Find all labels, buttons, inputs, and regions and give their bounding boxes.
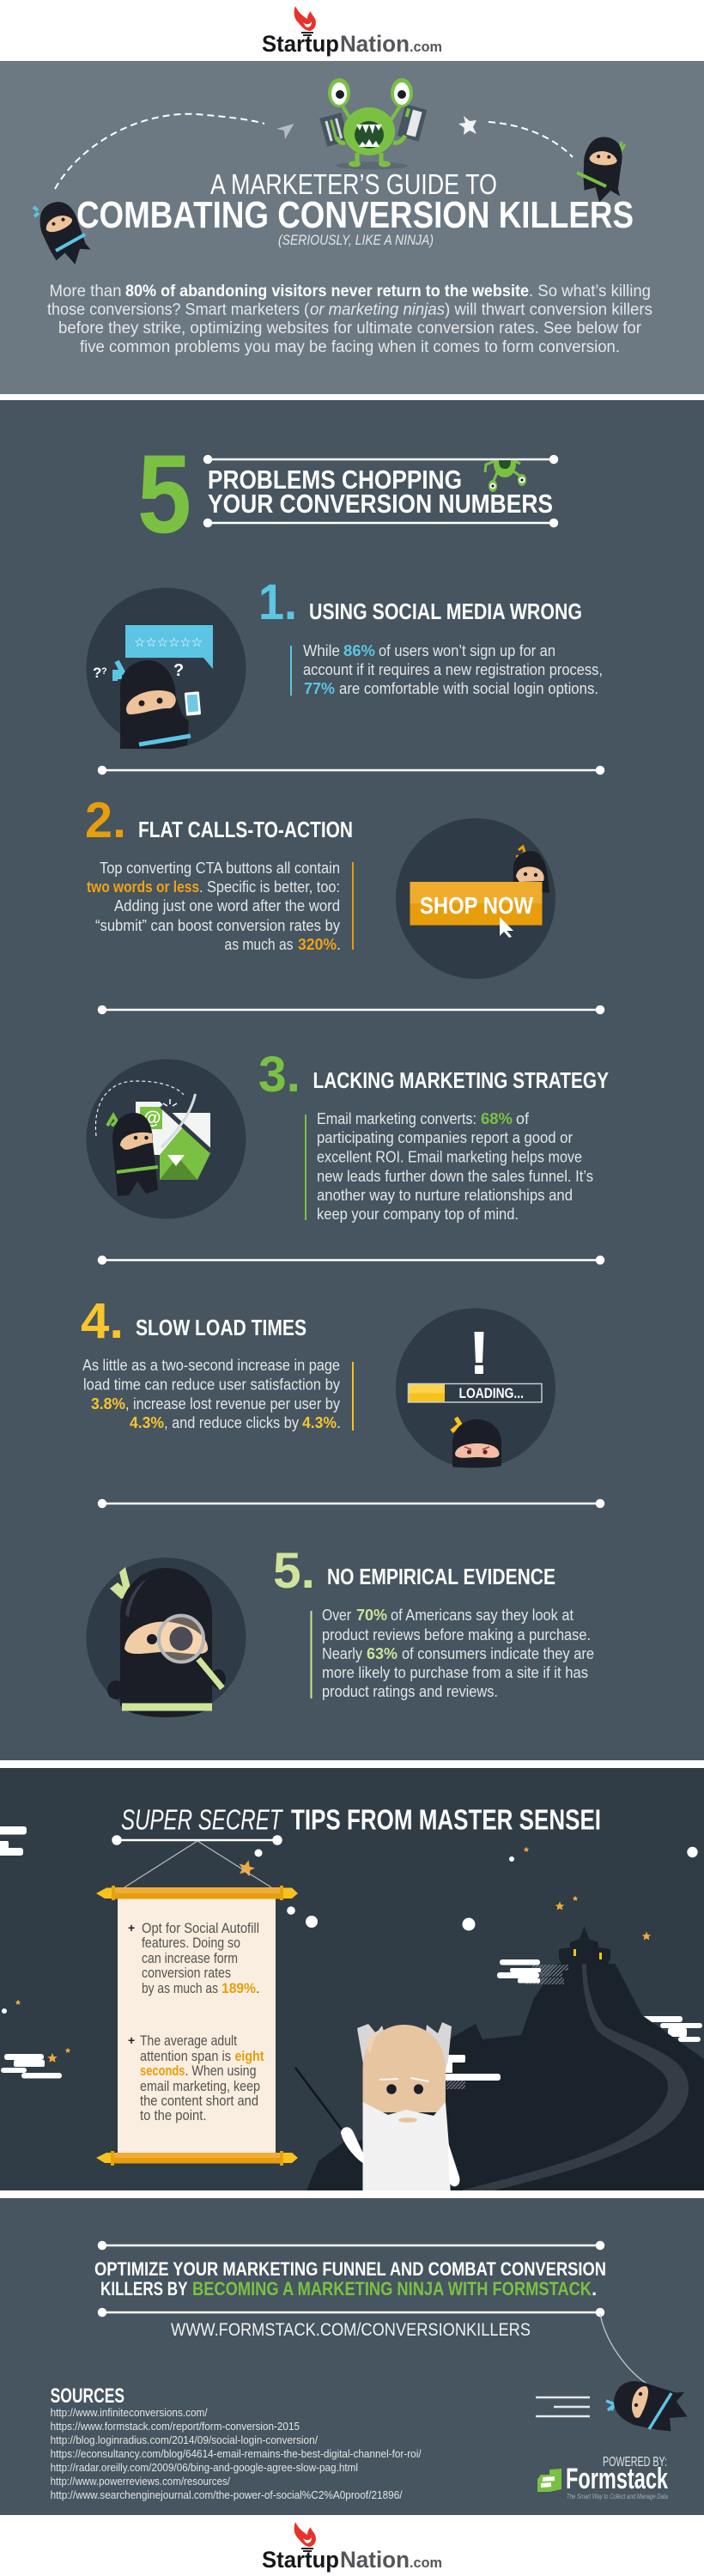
heading: NO EMPIRICAL EVIDENCE	[327, 1564, 555, 1589]
heading	[258, 1047, 609, 1103]
icon: hanging monster	[485, 460, 526, 492]
panel: header	[0, 61, 704, 400]
text block: 4.3%	[302, 1414, 337, 1431]
icon: loading bar ninja: LOADING...	[458, 1385, 524, 1401]
text block: product ratings and reviews.	[322, 1683, 498, 1700]
icon: ninja with phone: ☆☆☆☆☆☆	[134, 635, 203, 650]
tip 2: attention span is	[140, 2049, 231, 2064]
text block: “submit” can boost conversion rates by	[95, 917, 340, 934]
heading: 1.	[258, 574, 297, 630]
tip 1: can increase form	[142, 1951, 238, 1966]
road	[461, 1964, 689, 2190]
text block: Email marketing converts:	[317, 1110, 476, 1127]
tip 1: .	[256, 1981, 260, 1996]
text block: .	[337, 936, 341, 953]
text block: of users won’t sign up for an	[379, 642, 555, 659]
call to action text: KILLERS BY	[100, 2278, 187, 2300]
text block: load time can reduce user satisfaction by	[83, 1376, 340, 1393]
heading: 5 problems: YOUR CONVERSION NUMBERS	[208, 489, 553, 519]
problem 3	[86, 1047, 609, 1223]
sources: http://www.powerreviews.com/resources/	[51, 2475, 230, 2488]
text block: Nearly	[322, 1645, 362, 1662]
text block: 68%	[481, 1110, 513, 1127]
logo: StartupNation bottom: .com	[410, 2555, 442, 2571]
tip 1: 189%	[222, 1981, 256, 1996]
intro text block	[47, 282, 652, 356]
icon: loading bar ninja	[396, 1309, 555, 1468]
heading: 5 problems	[137, 431, 557, 556]
mountain with temple	[306, 1926, 704, 2190]
icon: ninja with phone: ?	[101, 666, 107, 677]
problem 2	[85, 793, 555, 979]
text block: Top converting CTA buttons all contain	[100, 860, 340, 877]
sources: SOURCES	[51, 2385, 124, 2408]
heading: SLOW LOAD TIMES	[136, 1315, 306, 1340]
tip 1: features. Doing so	[142, 1935, 240, 1951]
heading: FLAT CALLS-TO-ACTION	[138, 817, 353, 842]
icon: ninja right	[576, 133, 631, 206]
temple	[559, 1926, 610, 1966]
logo: StartupNation bottom	[262, 2522, 442, 2573]
icon: cursor	[500, 917, 513, 938]
logo: StartupNation top: Nation	[340, 31, 410, 57]
tip 1: by as much as	[142, 1981, 218, 1996]
clouds	[0, 1826, 702, 2078]
text block: account if it requires a new registration process,	[303, 661, 603, 678]
icon: green monster	[319, 78, 427, 170]
text block: As little as a two-second increase in page	[82, 1357, 340, 1374]
text block: of consumers indicate they are	[402, 1645, 594, 1662]
icon: shop now button: SHOP NOW	[420, 892, 533, 919]
text block: , and reduce clicks by	[164, 1414, 299, 1431]
url: WWW.FORMSTACK.COM/CONVERSIONKILLERS	[171, 2320, 531, 2340]
heading: 3.	[258, 1047, 300, 1103]
problem 1	[86, 574, 603, 749]
text block	[87, 860, 354, 953]
sources	[51, 2385, 422, 2501]
text block: Over	[322, 1607, 351, 1624]
master sensei	[295, 2022, 459, 2190]
tip 2: eight	[235, 2049, 264, 2064]
tip 2: +	[128, 2033, 135, 2047]
sources: http://blog.loginradius.com/2014/09/social-login-conversion/	[51, 2433, 318, 2446]
scroll top roller	[96, 1886, 298, 1900]
heading: USING SOCIAL MEDIA WRONG	[309, 598, 582, 624]
sources: https://www.formstack.com/report/form-conversion-2015	[51, 2420, 300, 2433]
text block: Adding just one word after the word	[114, 897, 340, 914]
text block: . Specific is better, too:	[199, 878, 340, 896]
tip 2: . When using	[185, 2063, 256, 2079]
tip 2: to the point.	[140, 2108, 206, 2123]
panel: call to action	[0, 2190, 704, 2515]
call to action text: OPTIMIZE YOUR MARKETING FUNNEL AND COMBAT CONVERSION	[94, 2258, 606, 2280]
heading: 5 problems: 5	[137, 431, 191, 556]
intro text block: 80% of abandoning visitors never return to the website	[125, 282, 529, 301]
cloud mid with hatching	[438, 1959, 568, 2089]
tip 1	[128, 1921, 260, 1996]
tip 2	[128, 2033, 264, 2123]
heading: 5.	[273, 1543, 315, 1599]
heading	[121, 1803, 601, 1836]
title: A MARKETER’S GUIDE TO	[210, 168, 497, 200]
icon: shop now button	[396, 818, 555, 979]
intro text block: More than	[50, 282, 122, 301]
logo: StartupNation top	[262, 6, 442, 57]
text block: are comfortable with social login options.	[339, 680, 598, 697]
text block: product reviews before making a purchase.	[322, 1626, 591, 1643]
call to action text	[94, 2258, 606, 2300]
text block: 320%	[298, 936, 337, 953]
tip 1: Opt for Social Autofill	[142, 1921, 259, 1936]
logo: StartupNation bottom: Startup	[262, 2547, 339, 2573]
text block: .	[337, 1414, 341, 1431]
text block: another way to nurture relationships and	[317, 1187, 573, 1204]
text block: While	[303, 642, 340, 659]
icon: ninja with phone: ?	[93, 665, 101, 681]
tip 2: email marketing, keep	[140, 2079, 260, 2094]
heading: 4.	[81, 1293, 124, 1349]
text block: 4.3%	[130, 1414, 164, 1431]
text block: 63%	[367, 1645, 398, 1662]
text block: more likely to purchase from a site if it has	[322, 1664, 588, 1681]
sources: https://econsultancy.com/blog/64614-email-remains-the-best-digital-channel-for-roi/	[51, 2447, 422, 2460]
heading: 5 problems: PROBLEMS CHOPPING	[208, 465, 462, 495]
text block: of Americans say they look at	[391, 1607, 574, 1624]
text block: 3.8%	[91, 1395, 125, 1413]
title	[76, 168, 634, 248]
icon: magnifier	[159, 1616, 222, 1688]
icon: ninja with magnifier	[86, 1558, 246, 1717]
logo: StartupNation top: Startup	[262, 31, 339, 57]
title: (SERIOUSLY, LIKE A NINJA)	[278, 232, 434, 248]
icon: flying ninja on rope	[536, 2314, 695, 2442]
icon: ninja with phone	[86, 587, 246, 749]
heading	[258, 574, 582, 630]
icon: paper plane	[276, 124, 294, 139]
heading	[85, 793, 353, 848]
text block: two words or less	[87, 878, 199, 896]
problem 4	[81, 1293, 555, 1468]
text block: keep your company top of mind.	[317, 1206, 519, 1223]
text block	[311, 1607, 594, 1700]
heading: SUPER SECRET	[121, 1803, 284, 1836]
scroll	[96, 1836, 298, 2166]
sources: http://radar.oreilly.com/2009/06/bing-and-google-agree-slow-pag.html	[51, 2461, 358, 2474]
text block: 86%	[343, 642, 375, 659]
icon: ninja with phone: ?	[173, 661, 184, 680]
tip 1: conversion rates	[142, 1965, 231, 1981]
text block: participating companies report a good or	[317, 1129, 573, 1146]
stars and dots	[2, 1846, 698, 2063]
text block	[290, 642, 603, 697]
intro text block: those conversions? Smart marketers (	[47, 301, 309, 319]
intro text block: . So what’s killing	[529, 282, 651, 301]
arrow: dashed throw arc left	[55, 114, 264, 189]
scroll bottom roller	[96, 2151, 298, 2166]
logo: Formstack: The Smart Way to Collect and Manage Data	[567, 2493, 668, 2500]
intro text block: five common problems you may be facing when it comes to form conversion.	[80, 337, 620, 356]
icon: ninja slicing email: @	[143, 1109, 161, 1128]
panel: tips from master sensei	[0, 1768, 704, 2190]
intro text block: before they strike, optimizing websites for ultimate conversion rates. See below for	[58, 319, 641, 337]
intro text block: or marketing ninjas	[310, 301, 445, 319]
arrow: dashed throw arc right	[489, 122, 573, 157]
icon: shuriken	[458, 116, 476, 135]
logo: StartupNation top: .com	[410, 39, 442, 55]
text block	[82, 1357, 354, 1431]
panel: five problems	[0, 400, 704, 1760]
text block: 70%	[356, 1607, 387, 1624]
heading: LACKING MARKETING STRATEGY	[313, 1067, 609, 1093]
call to action text: BECOMING A MARKETING NINJA WITH FORMSTACK	[192, 2278, 592, 2300]
logo: StartupNation bottom: Nation	[340, 2547, 410, 2573]
tip 2: seconds	[140, 2063, 185, 2079]
text block: 77%	[304, 680, 335, 697]
heading	[81, 1293, 306, 1349]
sources: http://www.infiniteconversions.com/	[51, 2406, 208, 2419]
tip 1: +	[128, 1921, 135, 1935]
call to action text: .	[592, 2278, 597, 2300]
heading: TIPS FROM MASTER SENSEI	[291, 1803, 601, 1836]
logo: Formstack	[537, 2455, 668, 2500]
text block: new leads further down the sales funnel. It’s	[317, 1168, 593, 1185]
problem 5	[86, 1543, 594, 1717]
icon: ninja slicing email	[86, 1060, 246, 1219]
icon: ninja left	[33, 197, 94, 270]
heading	[273, 1543, 555, 1599]
logo: Formstack: POWERED BY:	[603, 2455, 667, 2470]
tip 2: The average adult	[140, 2033, 237, 2049]
heading: 2.	[85, 793, 126, 848]
tip 2: the content short and	[140, 2093, 258, 2109]
text block: excellent ROI. Email marketing helps move	[317, 1149, 582, 1166]
intro text block: ) will thwart conversion killers	[445, 301, 652, 319]
text block	[305, 1110, 593, 1223]
text block: as much as	[225, 936, 294, 953]
text block: , increase lost revenue per user by	[125, 1395, 340, 1413]
text block: of	[516, 1110, 530, 1127]
sources: http://www.searchenginejournal.com/the-power-of-social%C2%A0proof/21896/	[51, 2488, 403, 2501]
